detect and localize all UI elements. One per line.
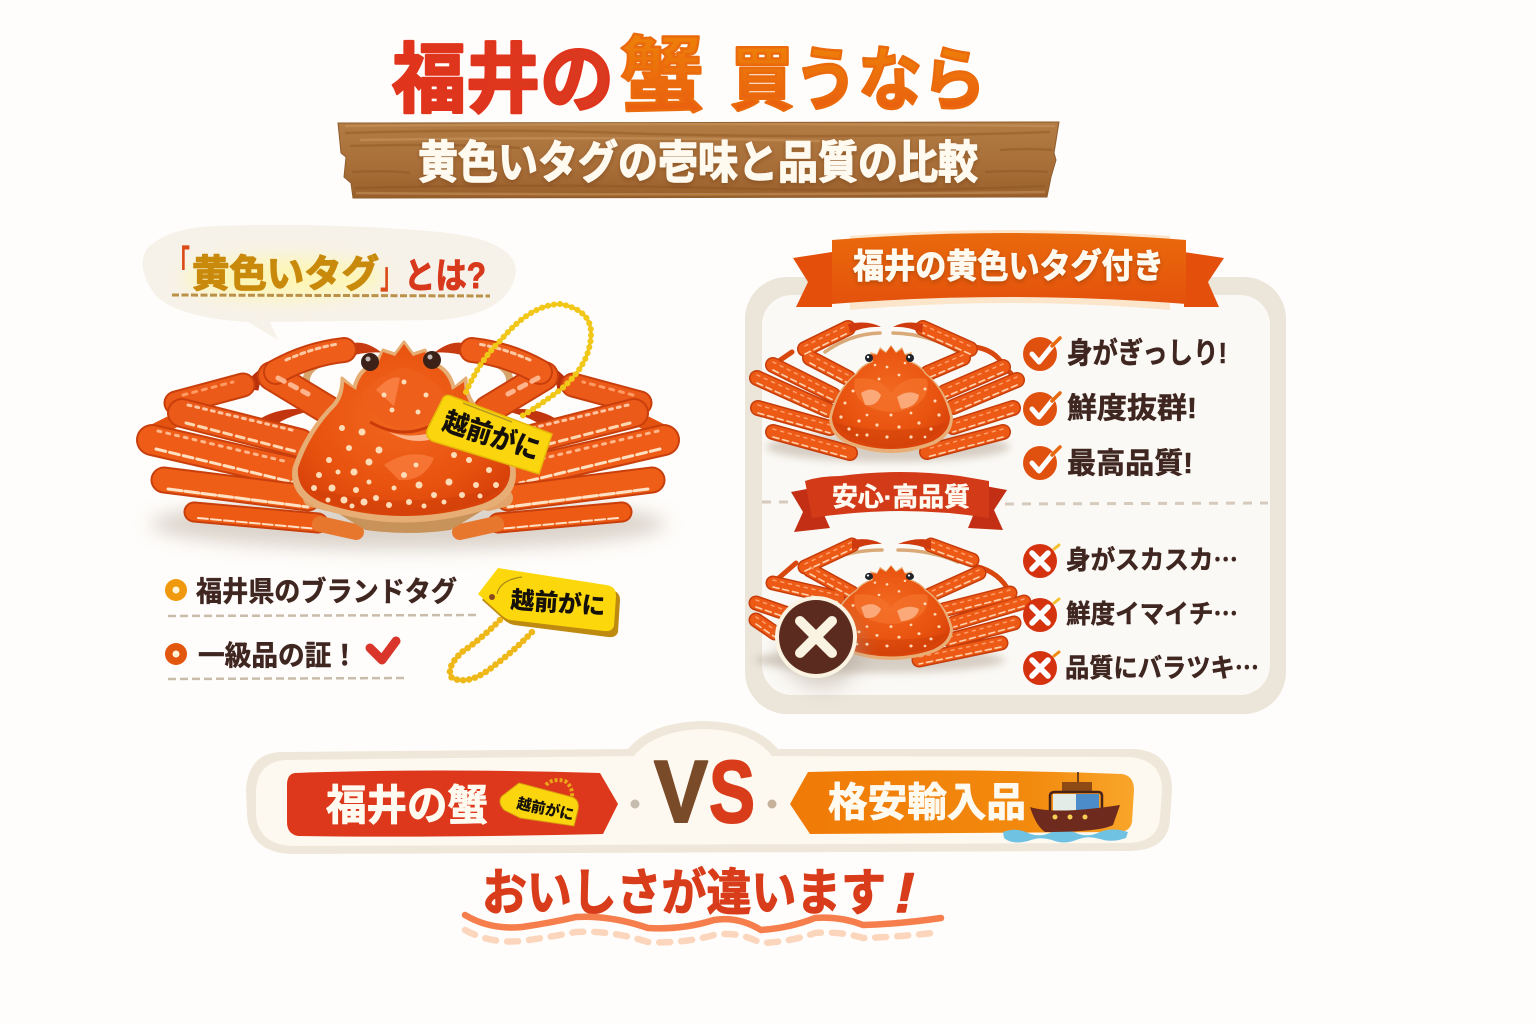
- title: 福井の: [392, 38, 614, 123]
- orange ribbon heading: 福井の黄色いタグ付き: [853, 248, 1164, 286]
- closing message: [465, 862, 941, 943]
- icon: cargo ship: [1003, 772, 1128, 842]
- VS mark: S: [709, 742, 755, 841]
- icon: red check: [370, 641, 396, 660]
- speech bubble: what is the yellow tag: 「: [168, 245, 190, 287]
- icon: large cross badge: [775, 596, 863, 689]
- speech bubble: what is the yellow tag: 黄色いタグ: [192, 254, 379, 296]
- bad point 1: 身がスカスカ…: [1066, 540, 1238, 577]
- list: first-grade proof: [165, 640, 405, 679]
- good point 3: 最高品質!: [1067, 447, 1193, 480]
- red ribbon: peace of mind and quality: [791, 472, 1007, 532]
- list: brand tag: 福井県のブランドタグ: [196, 575, 457, 607]
- list: first-grade proof: 一級品の証！: [198, 640, 358, 671]
- speech bubble: what is the yellow tag: 」: [380, 255, 402, 297]
- red label: Fukui crab: 福井の蟹: [326, 782, 488, 829]
- bad point 2: 鮮度イマイチ…: [1066, 594, 1238, 631]
- VS mark: V: [654, 742, 708, 841]
- red ribbon: peace of mind and quality: 安心·高品質: [832, 482, 970, 512]
- panel: versus: [246, 721, 1172, 854]
- closing message: !: [889, 862, 921, 924]
- orange label: cheap imports: [790, 770, 1134, 842]
- title: 買うなら: [730, 41, 986, 119]
- wooden sign subtitle: 黄色いタグの壱味と品質の比較: [418, 137, 978, 188]
- small yellow tag: [500, 780, 578, 826]
- speech bubble: what is the yellow tag: とは?: [404, 255, 486, 296]
- yellow tag on crab: 越前がに: [439, 405, 544, 466]
- yellow tag illustration: 越前がに: [510, 586, 606, 621]
- panel: comparison: [745, 230, 1286, 714]
- good point 2: [1023, 392, 1197, 426]
- list: brand tag: [165, 575, 480, 616]
- title: [392, 31, 986, 123]
- good point 1: [1023, 336, 1227, 371]
- good point 2: 鮮度抜群!: [1067, 392, 1197, 425]
- red label: Fukui crab: [287, 770, 618, 837]
- good point 3: [1023, 446, 1193, 480]
- tag cord: [466, 304, 591, 416]
- bad point 3: 品質にバラツキ…: [1065, 648, 1259, 685]
- VS mark: [630, 742, 776, 841]
- imported crab: [755, 539, 1024, 673]
- title: 蟹: [620, 31, 704, 122]
- speech bubble: what is the yellow tag: [143, 225, 516, 340]
- orange ribbon heading: [793, 230, 1224, 310]
- good crab: [757, 323, 1017, 462]
- large snow crab with yellow tag: [144, 304, 672, 550]
- wooden sign subtitle: [338, 122, 1059, 198]
- closing message: おいしさが違います: [482, 865, 886, 921]
- good point 1: 身がぎっしり!: [1067, 336, 1227, 370]
- small yellow tag: 越前がに: [515, 794, 576, 824]
- orange label: cheap imports: 格安輸入品: [828, 781, 1026, 825]
- yellow tag illustration: [450, 568, 620, 680]
